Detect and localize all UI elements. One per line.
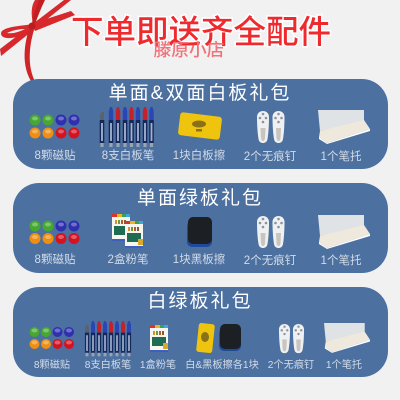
title: 下单即送齐全配件 [71,14,331,50]
labels: 白&黑板擦各1块 [185,358,259,371]
labels: 1个笔托 [326,358,362,371]
heading: 白绿板礼包 [147,290,253,312]
panel: green board gift pack [13,183,388,273]
icon: marker pens [85,321,131,356]
labels: 2个无痕钉 [244,253,297,267]
icon: marker pens [100,107,154,147]
labels: 8颗磁贴 [35,252,76,266]
heading: 单面绿板礼包 [137,187,263,209]
icon: hooks [257,216,284,248]
labels: 2个无痕钉 [268,358,314,371]
icon: pen tray [324,323,370,353]
labels: 2个无痕钉 [244,149,297,163]
panel: whiteboard gift pack [13,79,388,169]
labels [34,358,362,371]
icon: hooks [257,111,284,143]
labels: 8颗磁贴 [34,358,70,371]
labels [35,148,362,163]
labels: 8颗磁贴 [35,148,76,162]
icon: magnets [30,114,80,138]
icon: magnets [30,327,74,349]
icon: chalk box [150,325,168,352]
icon: red ribbon bow [0,0,75,88]
icon: yellow eraser [178,112,222,140]
labels: 1块黑板擦 [173,252,226,266]
icon: pen tray [318,215,370,249]
panel: white and green board gift pack [13,287,388,377]
labels: 8支白板笔 [85,358,131,371]
icon: hooks [279,324,304,353]
labels: 1盒粉笔 [140,358,176,371]
labels: 1个笔托 [321,253,362,267]
watermark: 滕原小店 [154,40,224,60]
labels: 1块白板擦 [173,148,226,162]
labels [35,252,362,267]
icon: chalk boxes [112,214,143,248]
heading: 单面&双面白板礼包 [109,82,291,104]
icon: black eraser [187,217,212,247]
labels: 1个笔托 [321,149,362,163]
labels: 2盒粉笔 [108,252,148,266]
labels: 8支白板笔 [102,148,154,162]
icon: magnets [30,220,80,244]
icon: yellow eraser [196,323,215,353]
icon: pen tray [318,110,370,144]
icon: black eraser [219,324,241,351]
